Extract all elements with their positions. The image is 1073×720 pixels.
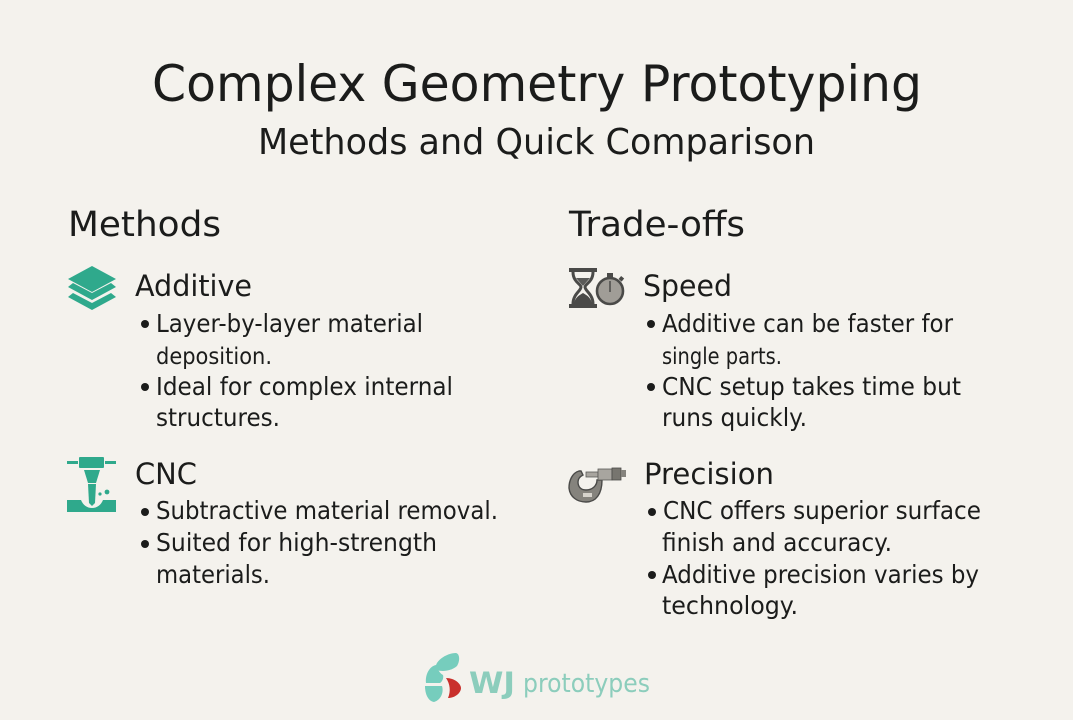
list: cnc points: materials. xyxy=(156,560,270,589)
list: precision points: technology. xyxy=(662,591,798,620)
heading: trade-offs: Trade-offs xyxy=(568,205,745,245)
icon: cnc mill xyxy=(67,457,116,512)
list: additive points: structures. xyxy=(156,403,280,432)
list: speed points: CNC setup takes time but xyxy=(662,372,961,401)
list: speed points: single parts. xyxy=(662,342,782,370)
icon: layers xyxy=(68,266,116,310)
logo wordmark: WJ xyxy=(469,666,515,700)
list: additive points: deposition. xyxy=(156,342,272,370)
list: additive points: Layer-by-layer material xyxy=(156,309,423,338)
list: precision points: Additive precision varies by xyxy=(662,560,979,589)
heading: methods: Methods xyxy=(68,205,221,245)
heading: speed: Speed xyxy=(643,269,732,303)
logo mark xyxy=(425,653,461,702)
heading: additive: Additive xyxy=(135,269,252,303)
logo: WJ prototypes xyxy=(425,653,650,702)
list: precision points xyxy=(648,496,981,620)
list: precision points: CNC offers superior surface xyxy=(663,496,981,525)
list: speed points: runs quickly. xyxy=(662,403,807,432)
title: Complex Geometry Prototyping xyxy=(152,55,922,113)
heading: precision: Precision xyxy=(644,457,774,491)
panel: trade-offs xyxy=(568,205,981,620)
list: speed points xyxy=(647,309,961,432)
list: precision points: finish and accuracy. xyxy=(662,528,892,557)
panel: methods xyxy=(67,205,498,589)
list: additive points xyxy=(141,309,453,432)
icon: micrometer xyxy=(569,468,626,502)
subtitle: Methods and Quick Comparison xyxy=(258,122,815,163)
list: cnc points: Subtractive material removal. xyxy=(156,496,498,525)
list: cnc points: Suited for high-strength xyxy=(156,528,437,557)
logo: WJ prototypes: prototypes xyxy=(523,669,650,699)
list: speed points: Additive can be faster for xyxy=(662,309,954,338)
heading: cnc: CNC xyxy=(135,457,197,491)
icon: hourglass and stopwatch xyxy=(569,268,624,308)
list: cnc points xyxy=(141,496,498,589)
list: additive points: Ideal for complex internal xyxy=(156,372,453,401)
